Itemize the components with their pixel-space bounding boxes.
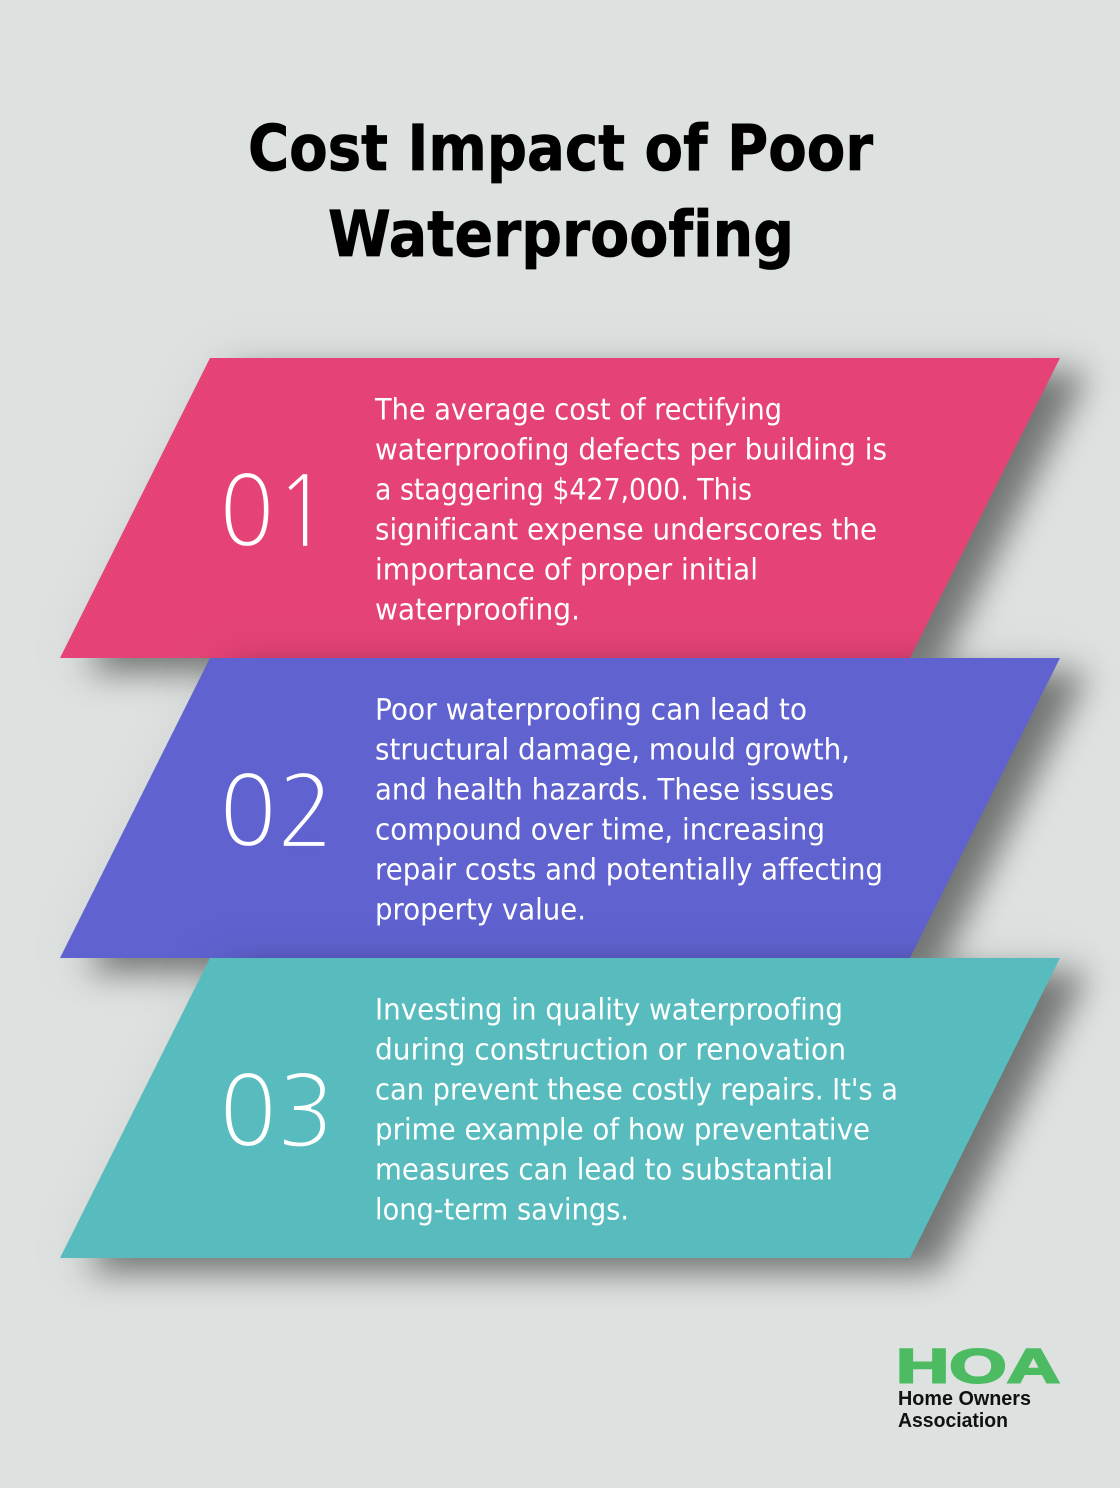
- title: Cost Impact of Poor: [248, 112, 873, 185]
- text block: card 02: compound over time, increasing: [375, 812, 825, 846]
- logo: HOA: Home Owners: [898, 1388, 1031, 1410]
- text block: card 02: structural damage, mould growth,: [375, 732, 850, 766]
- text block: card 03: Investing in quality waterproofing: [375, 992, 843, 1026]
- number 01: 01: [219, 462, 330, 562]
- text block: card 02: property value.: [375, 892, 586, 926]
- panel: card 02: [60, 658, 1088, 972]
- text block: card 03: measures can lead to substantial: [375, 1152, 833, 1186]
- text block: card 02: repair costs and potentially affecting: [375, 852, 883, 886]
- logo: HOA: Association: [898, 1410, 1008, 1432]
- text block: card 03: [375, 992, 898, 1226]
- text block: card 01: importance of proper initial: [375, 552, 758, 586]
- panel: card 03: [60, 958, 1088, 1272]
- logo: HOA: HOA: [896, 1340, 1060, 1394]
- title: [248, 112, 873, 271]
- text block: card 03: prime example of how preventative: [375, 1112, 870, 1146]
- number 03: 03: [219, 1062, 334, 1162]
- text block: card 03: long-term savings.: [375, 1192, 629, 1226]
- text block: card 01: [374, 392, 887, 626]
- text block: card 01: The average cost of rectifying: [374, 392, 782, 426]
- text block: card 01: waterproofing defects per building is: [375, 432, 887, 466]
- logo: HOA: [896, 1340, 1060, 1432]
- text block: card 03: can prevent these costly repairs. It's a: [375, 1072, 898, 1106]
- text block: card 02: Poor waterproofing can lead to: [375, 692, 807, 726]
- text block: card 01: waterproofing.: [375, 592, 580, 626]
- text block: card 01: a staggering $427,000. This: [375, 472, 752, 506]
- text block: card 02: [375, 692, 883, 926]
- number 02: 02: [219, 762, 334, 862]
- text block: card 03: during construction or renovation: [375, 1032, 846, 1066]
- panel: card 01: [60, 358, 1088, 672]
- title: Waterproofing: [328, 198, 794, 271]
- text block: card 02: and health hazards. These issues: [375, 772, 834, 806]
- text block: card 01: significant expense underscores the: [375, 512, 877, 546]
